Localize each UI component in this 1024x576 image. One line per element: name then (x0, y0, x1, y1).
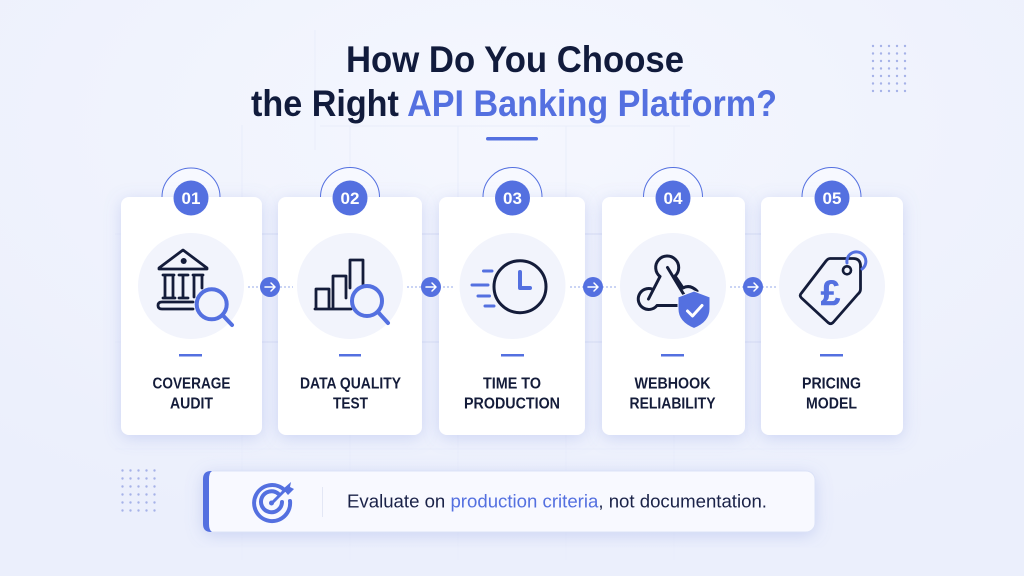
badge arc 5 (802, 168, 861, 197)
arrow 3 to 4 (570, 277, 616, 297)
decorative dots: top right (871, 44, 911, 96)
badge arc 2 (320, 168, 380, 197)
number badge 02 (332, 180, 368, 216)
step 5 panel: pricing model (761, 168, 903, 435)
decorative dots: bottom left (120, 468, 160, 516)
label 2: TEST (333, 396, 368, 413)
number badge 02: 02 (341, 189, 359, 208)
label 2 (300, 376, 402, 413)
card 1 (121, 197, 262, 435)
card 3 (439, 197, 585, 435)
callout: takeaway bar (203, 471, 815, 532)
label 3 (464, 376, 560, 413)
label 1 (152, 376, 230, 413)
icon: bank with magnifier (158, 250, 232, 325)
callout text: Evaluate on production criteria, not documentation. (347, 490, 767, 512)
icon: webhook with shield (638, 256, 710, 328)
accent bar 1 (179, 354, 202, 356)
label 4 (630, 376, 716, 413)
label 4: RELIABILITY (630, 396, 716, 413)
icon circle 5 (779, 233, 885, 339)
label 2: DATA QUALITY (300, 376, 402, 393)
step 1 panel: coverage audit (121, 168, 262, 435)
arrow 2 to 3 (407, 277, 455, 297)
arrow 4 to 5 (730, 277, 776, 297)
number badge 03: 03 (503, 189, 522, 208)
step 2 panel: data quality test (278, 168, 422, 435)
badge arc 1 (162, 168, 220, 197)
icon: price tag (800, 252, 866, 324)
shield (678, 291, 710, 328)
number badge 04: 04 (664, 189, 683, 208)
icon: clock with speed lines (472, 261, 546, 313)
icon: bar chart with magnifier (315, 260, 388, 323)
icon: price tag: £ (821, 274, 841, 313)
number badge 04 (656, 180, 690, 216)
number badge 01: 01 (182, 189, 200, 208)
label 3: PRODUCTION (464, 396, 560, 413)
accent bar 5 (820, 354, 843, 356)
label 1: COVERAGE (152, 376, 230, 393)
badge arc 3 (483, 168, 542, 197)
arrow 1 to 2 (248, 277, 293, 297)
callout divider (322, 487, 323, 517)
number badge 03 (495, 180, 530, 216)
number badge 05: 05 (823, 189, 841, 208)
card 5 (761, 197, 903, 435)
icon circle 4 (620, 233, 726, 339)
icon circle 2 (297, 233, 403, 339)
label 3: TIME TO (483, 376, 541, 393)
label 5: PRICING (802, 376, 861, 393)
step 3 panel: time to production (439, 168, 585, 435)
card 4 (602, 197, 745, 435)
label 5: MODEL (806, 396, 857, 413)
label 1: AUDIT (170, 396, 213, 413)
accent bar 3 (501, 354, 524, 356)
callout background (203, 471, 815, 532)
title underline (486, 137, 538, 140)
title: the Right API Banking Platform? (251, 83, 777, 124)
label 5 (802, 376, 861, 413)
accent bar 4 (661, 354, 684, 356)
label 4: WEBHOOK (634, 376, 711, 393)
icon circle 1 (138, 233, 244, 339)
title (251, 39, 777, 124)
callout left accent (203, 471, 212, 532)
number badge 05 (814, 180, 850, 216)
accent bar 2 (339, 354, 361, 356)
title: How Do You Choose (346, 39, 684, 80)
number badge 01 (174, 180, 208, 216)
icon: target with arrow (254, 482, 294, 521)
badge arc 4 (644, 168, 702, 197)
step 4 panel: webhook reliability (602, 168, 745, 435)
icon circle 3 (460, 233, 566, 339)
card 2 (278, 197, 422, 435)
